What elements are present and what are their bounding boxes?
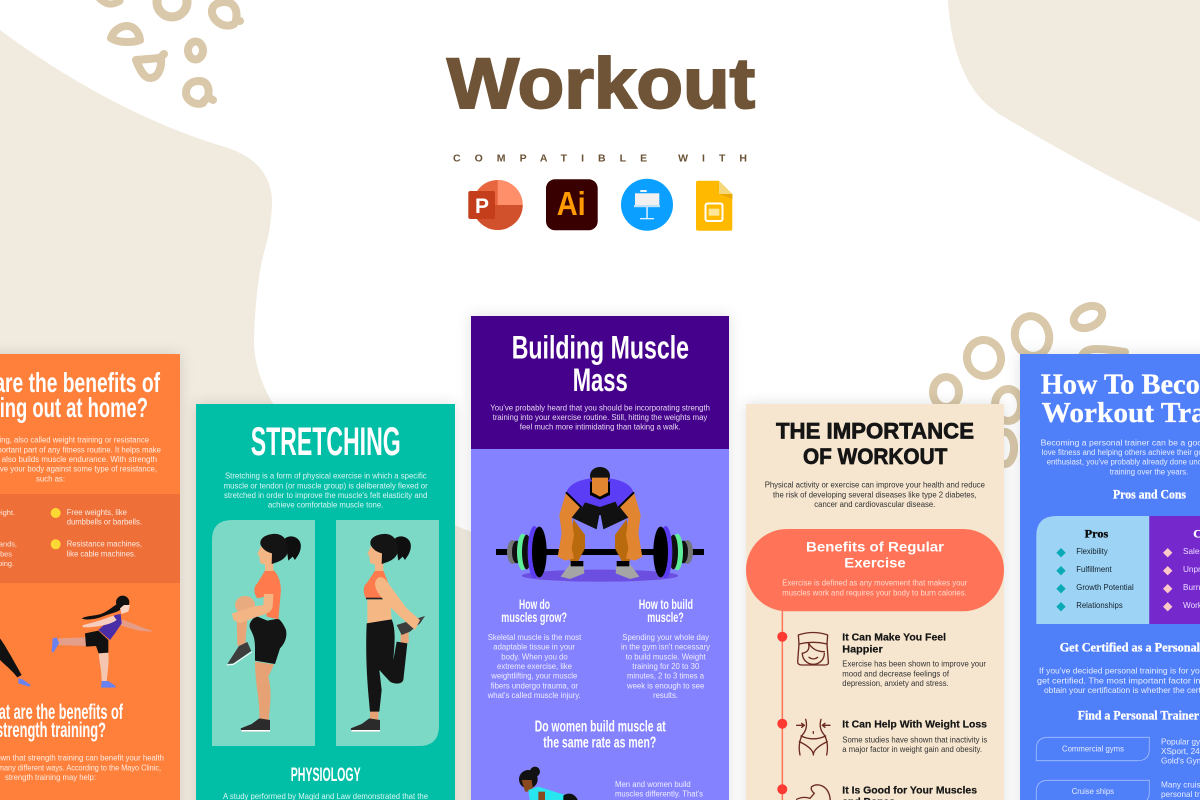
stretching intro text: Stretching is a form of physical exercise in which a specific (225, 472, 427, 481)
icon: waist (797, 719, 830, 755)
text: how muscles grow: adaptable tissue in your (493, 643, 575, 652)
card: pros: Fulfillment (1076, 565, 1113, 574)
item: weight loss (842, 720, 987, 754)
icon: muscle arm (797, 785, 830, 800)
text: how muscles grow: what's called muscle injury. (487, 691, 581, 700)
muscle intro text (490, 403, 710, 432)
icon: happy face (798, 632, 828, 665)
panel: workout trainer (1020, 354, 1200, 800)
text: how muscles grow: extreme exercise, like (497, 662, 572, 671)
muscle intro text: feel much more intimidating than taking a walk. (520, 423, 681, 432)
card: knee stretch (212, 520, 315, 746)
importance intro text: the risk of developing several diseases like type 2 diabetes, (773, 490, 977, 499)
band: resistance types: Free weights, like (67, 508, 127, 517)
importance intro text: Physical activity or exercise can improve your health and reduce (765, 481, 985, 490)
figure: woman knee stretch (227, 534, 301, 732)
text: women and men: Men and women build (615, 780, 691, 789)
item: feel happier: mood and decrease feelings of (842, 669, 950, 678)
text: how muscles grow: Skeletal muscle is the most (488, 633, 582, 642)
timeline line (782, 611, 783, 800)
band: resistance types (0, 494, 180, 583)
band: resistance types: dumbbells or barbells. (67, 518, 142, 527)
card: pros: Pros (1085, 526, 1109, 540)
strength text (0, 754, 164, 782)
card: cons (1149, 516, 1200, 624)
card: pros: Growth Potential (1076, 583, 1134, 592)
outline: commercial gyms: Commercial gyms (1062, 745, 1124, 754)
background blob left (0, 30, 480, 800)
heading: pros and cons: Pros and Cons (1113, 487, 1186, 502)
text: how muscles grow: weightlifting, your muscle (490, 672, 577, 681)
heading: building muscle (512, 329, 689, 398)
intro text (0, 436, 161, 483)
heading: how do muscles grow (501, 596, 567, 625)
heading: how do muscles grow: muscles grow? (501, 609, 567, 625)
panel: home workout benefits (0, 354, 180, 800)
panel: building muscle mass (471, 316, 729, 800)
heading: strength benefits (0, 701, 124, 742)
item: feel happier: Happier (842, 644, 883, 655)
text: how to build muscle: to build muscle. Weight (626, 652, 707, 661)
heading: how do muscles grow: How do (519, 596, 550, 612)
decorative squiggles right (933, 302, 1125, 464)
band: resistance types: Resistance machines, (67, 540, 142, 549)
card: quad stretch (336, 520, 439, 746)
text: women and men: muscles differently. That's (615, 790, 703, 799)
card: pros (1036, 516, 1149, 624)
item: weight loss: a major factor in weight gain and obesity. (842, 745, 982, 754)
heading: women build muscle: the same rate as men? (543, 735, 656, 752)
text: how muscles grow (487, 633, 582, 700)
text: how to build muscle: in the gym isn't necessary (621, 643, 710, 652)
icon: PowerPoint: P (475, 195, 489, 218)
stretching intro text: muscle or tendon (or muscle group) is deliberately flexed or (224, 481, 428, 490)
pill: benefits of regular exercise: Benefits of Regular (806, 540, 945, 555)
heading: importance: OF WORKOUT (803, 444, 948, 469)
heading: strength benefits: strength training? (0, 719, 106, 742)
pill: benefits of regular exercise: Exercise is defined as any movement that makes your (782, 579, 968, 588)
heading: women build muscle: Do women build muscle at (535, 719, 666, 736)
trainer intro text (1041, 438, 1200, 476)
muscle intro text: You've probably heard that you should be incorporating strength (490, 403, 710, 412)
text: women and men (615, 780, 703, 799)
text: how muscles grow: fibers undergo trauma, or (491, 681, 578, 690)
subtitle: COMPATIBLE WITH (453, 153, 747, 165)
decorative squiggles top left (98, 0, 240, 104)
text: how to build muscle: minutes, 2 to 3 times a (627, 672, 705, 681)
importance intro text: cancer and cardiovascular disease. (814, 500, 935, 509)
figure: woman exercising (519, 767, 578, 800)
text: how to build muscle: week is enough to see (626, 681, 704, 690)
panel: importance of workout (746, 404, 1004, 800)
text: commercial gyms (1161, 737, 1200, 766)
heading: importance: THE IMPORTANCE (776, 418, 974, 443)
heading: stretching: STRETCHING (251, 420, 401, 464)
item: feel happier: Exercise has been shown to improve your (842, 660, 986, 669)
heading: importance (776, 418, 974, 469)
text: cruise ships (1161, 780, 1200, 799)
item: feel happier: It Can Make You Feel (842, 633, 946, 644)
item: feel happier (842, 633, 986, 688)
muscle intro text: training into your exercise routine. Still, hitting the weights may (493, 413, 707, 422)
card: pros: Flexibility (1076, 547, 1108, 556)
item: muscles and bones: It Is Good for Your Muscles (842, 785, 977, 796)
outline: cruise ships: Cruise ships (1072, 787, 1114, 796)
text: how muscles grow: body. When you do (501, 652, 568, 661)
pill: benefits of regular exercise (746, 529, 1004, 611)
outline: cruise ships (1036, 780, 1149, 800)
heading: physiology: PHYSIOLOGY (291, 765, 361, 786)
outline: commercial gyms (1036, 737, 1149, 761)
icon: Illustrator: Ai (557, 185, 586, 222)
stretching intro text (224, 472, 428, 510)
heading: how to build muscle (639, 596, 693, 625)
text: how to build muscle: training for 20 to 30 (632, 662, 700, 671)
trainer intro text: training over the years. (1110, 467, 1188, 476)
strength text: strength training may help: (5, 773, 96, 782)
stretching intro text: stretched in order to improve the muscle's felt elasticity and (224, 491, 427, 500)
item: weight loss: Some studies have shown that inactivity is (842, 735, 987, 744)
title: Workout (447, 45, 755, 124)
text: how to build muscle: results. (653, 691, 678, 700)
background blob right (948, 0, 1200, 222)
timeline dots (777, 632, 787, 794)
card: pros: Relationships (1076, 601, 1123, 610)
heading: women build muscle (535, 719, 666, 752)
importance intro text (765, 481, 985, 509)
certified text (1037, 667, 1200, 695)
heading: building muscle: Building Muscle (512, 329, 689, 365)
header band (471, 316, 729, 449)
figure: women balancing (0, 596, 152, 688)
panel: stretching (196, 404, 455, 800)
icon: Illustrator (546, 179, 598, 230)
stretching intro text: achieve comfortable muscle tone. (268, 501, 383, 510)
heading: building muscle: Mass (573, 362, 628, 398)
heading: how to build muscle: muscle? (647, 609, 684, 625)
item: feel happier: depression, anxiety and stress. (842, 679, 949, 688)
pill: benefits of regular exercise: Exercise (844, 556, 906, 571)
text: how to build muscle: Spending your whole day (622, 633, 709, 642)
intro text: such as: (36, 474, 65, 483)
heading: how to build muscle: How to build (639, 596, 693, 612)
icon: Keynote (621, 179, 673, 231)
band: resistance types: like cable machines. (67, 549, 136, 558)
text: how to build muscle (621, 633, 710, 700)
heading: how to become (1041, 368, 1200, 429)
item: weight loss: It Can Help With Weight Loss (842, 720, 987, 731)
heading: home benefits (0, 367, 160, 423)
icon: PowerPoint (468, 180, 523, 230)
icon: Google Slides (696, 181, 732, 231)
pill: benefits of regular exercise: muscles work and requires your body to burn calories. (782, 588, 967, 597)
figure: woman quad stretch (351, 534, 425, 732)
figure: weightlifter deadlift (496, 467, 704, 582)
